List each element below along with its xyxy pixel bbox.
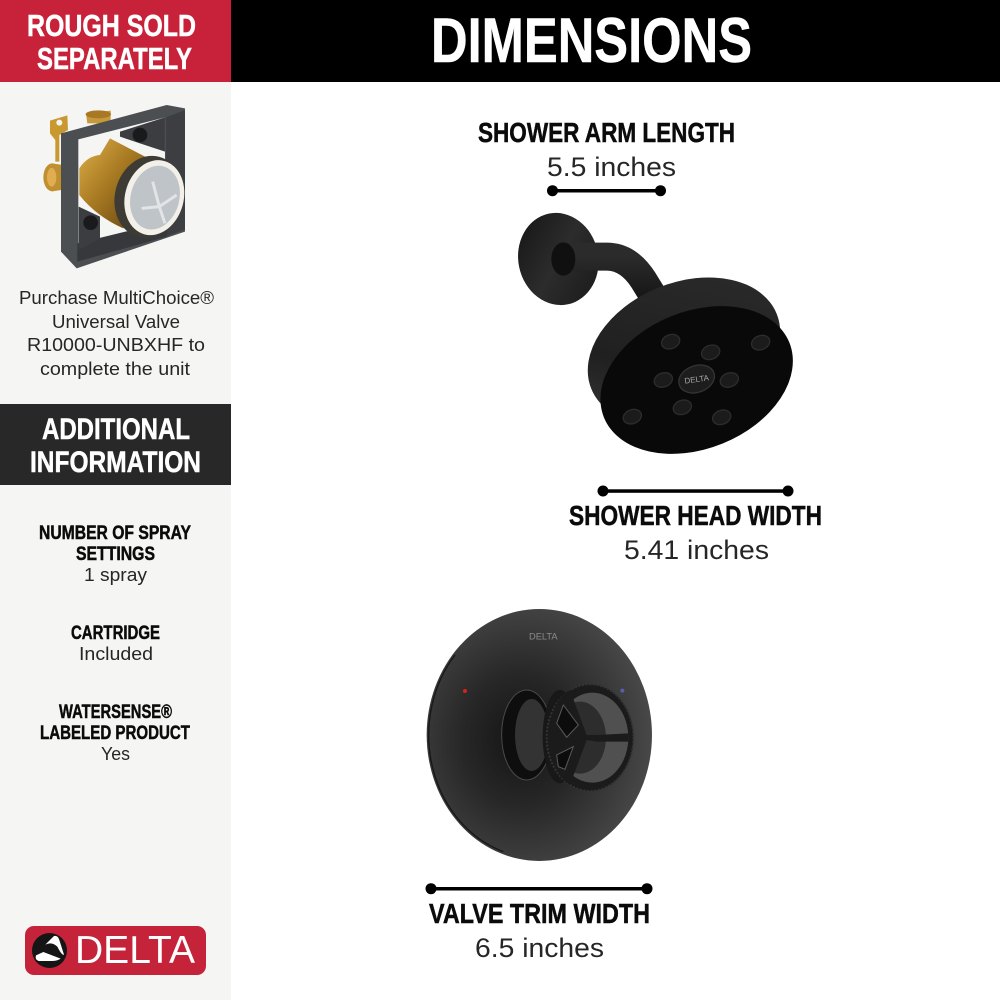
text: valve purchase note [19, 288, 214, 379]
label: valve trim width: VALVE TRIM WIDTH [429, 898, 650, 929]
text: watersense labeled product [40, 701, 190, 764]
label: valve trim width [429, 898, 650, 963]
text: watersense labeled product: Yes [101, 744, 130, 764]
label: shower arm length [478, 117, 735, 182]
text: number of spray settings [39, 522, 191, 585]
text: valve purchase note: R10000-UNBXHF to [27, 335, 205, 355]
center logo badge [675, 360, 718, 398]
text: cartridge [71, 622, 160, 664]
center logo badge: DELTA [684, 373, 710, 386]
label: shower arm length: SHOWER ARM LENGTH [478, 117, 735, 148]
banner: additional information [0, 404, 231, 485]
banner: additional information: INFORMATION [30, 446, 201, 479]
text: valve purchase note: Purchase MultiChoice® [19, 288, 214, 308]
icon: valve trim: DELTA [529, 631, 558, 641]
icon: shower head and arm [510, 205, 815, 481]
label: shower head width: SHOWER HEAD WIDTH [569, 500, 822, 531]
text: cartridge: Included [79, 644, 153, 664]
arrow: shower head dimension line [598, 486, 794, 496]
logo: delta: DELTA [75, 929, 195, 972]
panel: left sidebar background [0, 0, 231, 1000]
label: shower head width [569, 500, 822, 565]
nozzles [621, 332, 772, 427]
label: shower arm length: 5.5 inches [547, 152, 676, 182]
banner: rough sold separately [0, 0, 231, 82]
banner: rough sold separately: SEPARATELY [37, 41, 192, 76]
icon: rough-in valve photo [43, 105, 192, 268]
text: number of spray settings: NUMBER OF SPRAY [39, 522, 191, 544]
banner: rough sold separately: ROUGH SOLD [27, 8, 196, 43]
arrow: shower arm dimension line [547, 185, 666, 196]
label: valve trim width: 6.5 inches [475, 933, 604, 963]
text: number of spray settings: 1 spray [84, 565, 147, 585]
text: cartridge: CARTRIDGE [71, 622, 160, 644]
logo: delta [25, 926, 206, 975]
text: number of spray settings: SETTINGS [76, 543, 155, 565]
label: shower head width: 5.41 inches [624, 535, 769, 565]
icon: valve trim [427, 609, 652, 861]
arrow: valve trim dimension line [426, 883, 652, 894]
title banner: dimensions [231, 0, 1000, 82]
text: watersense labeled product: LABELED PRODUCT [40, 722, 190, 744]
title banner: dimensions: DIMENSIONS [431, 6, 752, 76]
text: watersense labeled product: WATERSENSE® [59, 701, 172, 723]
banner: additional information: ADDITIONAL [42, 413, 190, 446]
text: valve purchase note: complete the unit [40, 359, 190, 379]
text: valve purchase note: Universal Valve [52, 312, 180, 332]
